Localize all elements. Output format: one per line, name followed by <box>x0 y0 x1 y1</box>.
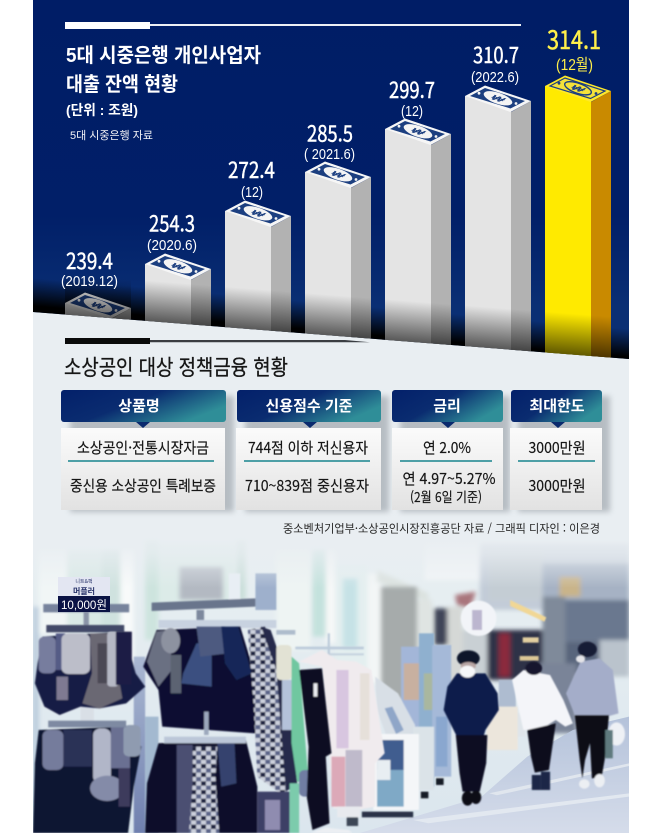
value labels <box>61 21 601 290</box>
table column: credit score: 744점 이하 저신용자 <box>248 437 368 458</box>
lower left scarves <box>33 721 141 833</box>
table column: product name: 소상공인·전통시장자금 <box>77 437 209 458</box>
table column: maximum limit: 3000만원 <box>528 475 586 496</box>
value labels: 285.5 <box>307 116 353 148</box>
table column: product name: 중신용 소상공인 특례보증 <box>70 475 216 496</box>
bar: 2021.12 <box>385 118 451 359</box>
top fog over photo <box>70 539 629 584</box>
credit line: 중소벤처기업부·소상공인시장진흥공단 자료 / 그래픽 디자인 : 이은경 <box>283 520 600 536</box>
table column: interest rate: (2월 6일 기준) <box>410 486 482 506</box>
source note: 5대 시중은행 자료 <box>70 129 153 142</box>
value labels: 239.4 <box>66 244 113 276</box>
chart header rule <box>65 22 521 29</box>
person in navy jacket <box>444 650 499 806</box>
price sign: 10,000원 <box>61 598 107 612</box>
photo shelves and cards <box>43 573 295 635</box>
photo white coats rack <box>295 633 385 833</box>
price sign: 니트&퍽 <box>75 578 93 585</box>
person in grey puffer <box>566 642 625 789</box>
photo left pillars <box>81 657 158 833</box>
bar: 2021.6 <box>305 162 371 357</box>
table column: interest rate: 연 2.0% <box>423 437 471 458</box>
bar: 2020.12: ₩ <box>248 209 267 219</box>
photo shop signs <box>461 600 546 750</box>
value labels: 314.1 <box>547 21 601 57</box>
table column: product name: 상품명 <box>118 395 160 416</box>
upper left scarves <box>35 632 145 715</box>
value labels: (2022.6) <box>471 69 519 86</box>
table column: product name <box>61 390 226 510</box>
value labels: 254.3 <box>149 206 195 238</box>
price sign: 머플러 <box>73 586 95 597</box>
photo: shopping street <box>33 530 629 833</box>
price sign <box>58 577 110 612</box>
title: loan balance: 대출 잔액 현황 <box>66 73 178 96</box>
bar: 2020.12 <box>225 200 291 332</box>
bar chart <box>65 76 611 378</box>
lower middle scarves <box>145 737 257 833</box>
bar: 2022.6: ₩ <box>488 94 507 104</box>
bar: 2021.12: ₩ <box>408 127 427 137</box>
heading: policy finance: 소상공인 대상 정책금융 현황 <box>64 351 288 382</box>
photo scarf clusters <box>33 627 331 833</box>
value labels: (2019.12) <box>61 273 118 290</box>
table column: interest rate: 연 4.97~5.27% <box>402 468 496 489</box>
photo ground: paved street <box>360 717 629 833</box>
bar: 2020.6 <box>145 254 211 326</box>
unit text: (단위 : 조원) <box>66 102 138 118</box>
value labels: 299.7 <box>389 73 435 105</box>
person in white puffer <box>512 662 573 790</box>
table column: maximum limit: 3000만원 <box>528 437 586 458</box>
coats: cream, green, black <box>276 645 331 833</box>
panel: light section background <box>33 300 629 540</box>
title: loan balance <box>66 44 261 96</box>
table column: maximum limit <box>510 390 602 510</box>
value labels: 272.4 <box>228 153 275 185</box>
bar: 2022.12 highlighted: ₩ <box>568 84 587 94</box>
table column: credit score <box>236 390 381 510</box>
bar: 2022.6 <box>465 86 531 361</box>
panel: navy chart background <box>33 0 629 360</box>
bar: 2019.12: ₩ <box>88 301 107 311</box>
bar: 2021.6: ₩ <box>328 170 347 180</box>
photo people <box>444 642 625 806</box>
plaid scarves <box>248 627 297 833</box>
bar: 2020.6: ₩ <box>168 262 187 272</box>
bar: 2022.12 highlighted <box>545 76 611 366</box>
photo posters <box>401 633 451 787</box>
table column: interest rate: 금리 <box>433 395 461 416</box>
policy section rule <box>65 338 370 344</box>
middle dark scarves <box>143 627 257 735</box>
value labels: (12) <box>241 184 263 201</box>
table column: credit score: 710~839점 중신용자 <box>245 475 369 496</box>
value labels: (12) <box>401 103 423 120</box>
value labels: (2020.6) <box>147 237 197 254</box>
table column: maximum limit: 최대한도 <box>529 395 585 416</box>
value labels: (12월) <box>556 56 593 74</box>
value labels: 310.7 <box>473 38 519 70</box>
value labels: ( 2021.6) <box>304 146 355 163</box>
photo backdrop: store fronts and fogged street <box>33 540 629 833</box>
table shadows <box>70 396 610 512</box>
title: loan balance: 5대 시중은행 개인사업자 <box>66 44 261 67</box>
table column: credit score: 신용점수 기준 <box>265 395 353 416</box>
bar base shading <box>65 279 611 358</box>
table column: interest rate <box>392 390 503 510</box>
photo display stands <box>362 677 444 817</box>
bar: 2019.12 <box>65 292 131 320</box>
